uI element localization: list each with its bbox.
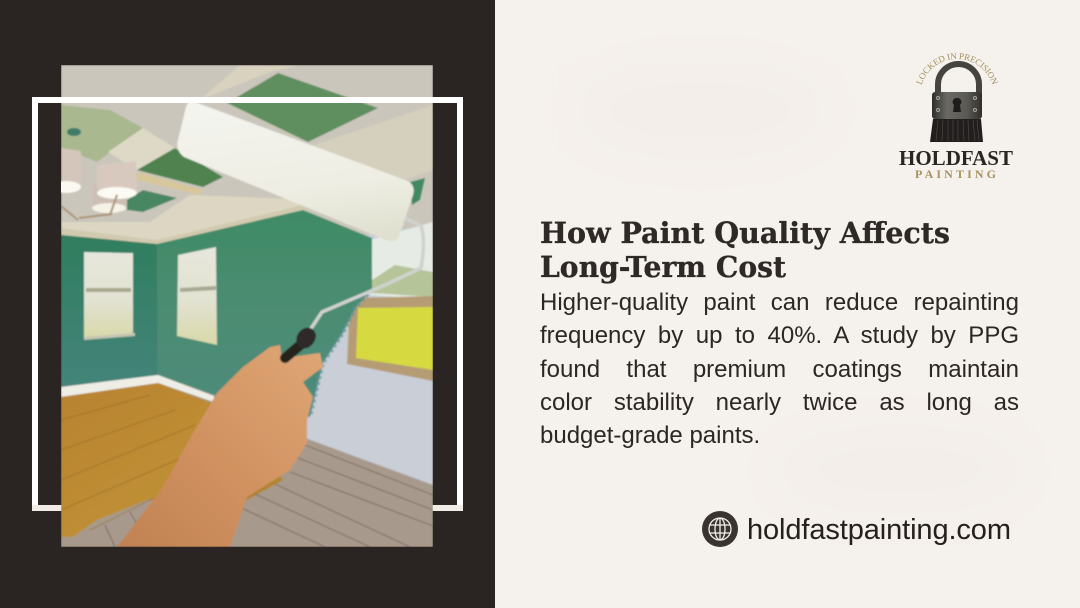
paint edge speckle — [310, 290, 372, 417]
body paragraph: budget-grade paints. — [540, 422, 760, 449]
logo — [899, 53, 1013, 181]
rivets — [936, 96, 976, 112]
sub wordmark: PAINTING — [915, 167, 996, 181]
keyhole — [953, 98, 961, 112]
heading — [540, 216, 950, 284]
main green wall — [157, 210, 372, 417]
photo base — [61, 264, 433, 547]
windows on green walls — [84, 252, 133, 340]
white frame, top bar over photo — [32, 97, 463, 103]
wood floor — [61, 383, 283, 537]
hand — [117, 345, 323, 547]
crown molding — [61, 195, 300, 240]
ceiling — [61, 65, 433, 245]
photo: painter rolling green paint in room — [51, 65, 433, 547]
window with yellow view — [347, 296, 433, 381]
body paragraph: color stability nearly twice as long as — [540, 389, 1019, 416]
arc tagline: LOCKED IN PRECISION — [916, 53, 998, 85]
wood grain lines — [61, 395, 200, 530]
grey plank lines — [105, 445, 433, 547]
right unpainted wall — [300, 225, 433, 485]
roller handle — [310, 218, 424, 330]
website address: holdfastpainting.com — [747, 514, 1011, 546]
body paragraph: Higher-quality paint can reduce repainting — [540, 289, 1019, 316]
dark left panel — [0, 0, 495, 608]
roller cover — [177, 101, 414, 242]
website icon: globe — [702, 511, 738, 547]
brush bristles — [930, 119, 983, 142]
roller grip — [285, 336, 311, 358]
body paragraph — [540, 289, 1019, 449]
padlock shackle — [938, 64, 979, 96]
left green wall — [61, 235, 158, 387]
wordmark: HOLDFAST — [899, 146, 1013, 170]
padlock body — [932, 92, 982, 119]
body paragraph: frequency by up to 40%. A study by PPG — [540, 322, 1019, 349]
chandelier — [51, 128, 137, 220]
heading: How Paint Quality Affects — [540, 216, 950, 250]
body paragraph: found that premium coatings maintain — [540, 356, 1019, 383]
ceiling green panels — [61, 105, 143, 162]
baseboards — [61, 375, 214, 402]
upper window view — [370, 222, 433, 300]
heading: Long-Term Cost — [540, 250, 787, 284]
background: paper texture — [495, 0, 1080, 608]
white frame, back layer — [32, 97, 463, 511]
